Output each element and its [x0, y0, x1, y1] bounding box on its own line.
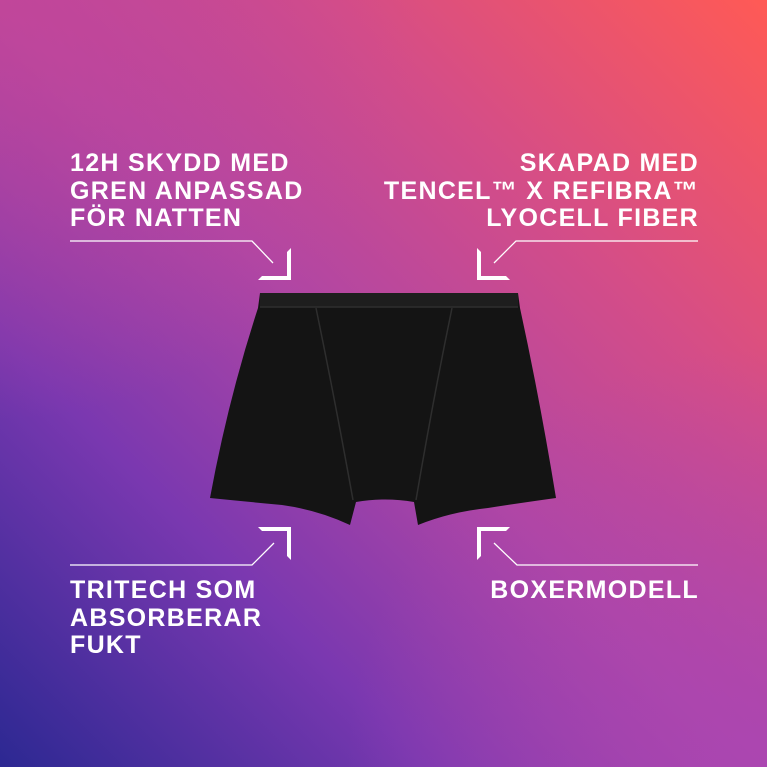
text: top left: GREN ANPASSAD	[70, 176, 304, 204]
icon: corner brackets	[258, 248, 510, 560]
text: top left: 12H SKYDD MED	[70, 149, 290, 177]
text: bottom left: TRITECH SOM	[70, 576, 257, 604]
text: bottom left: FUKT	[70, 631, 142, 659]
text: top right: SKAPAD MED	[520, 149, 699, 177]
text: bottom left: ABSORBERAR	[70, 604, 262, 632]
text: bottom right: BOXERMODELL	[490, 576, 699, 604]
text: top right	[384, 149, 699, 232]
text: top left	[70, 149, 304, 232]
callout lines	[70, 241, 698, 565]
text: top right: LYOCELL FIBER	[486, 204, 699, 232]
text: top left: FÖR NATTEN	[70, 204, 242, 232]
shorts	[210, 293, 556, 525]
text: bottom left	[70, 576, 262, 659]
text: top right: TENCEL™ X REFIBRA™	[384, 176, 699, 204]
